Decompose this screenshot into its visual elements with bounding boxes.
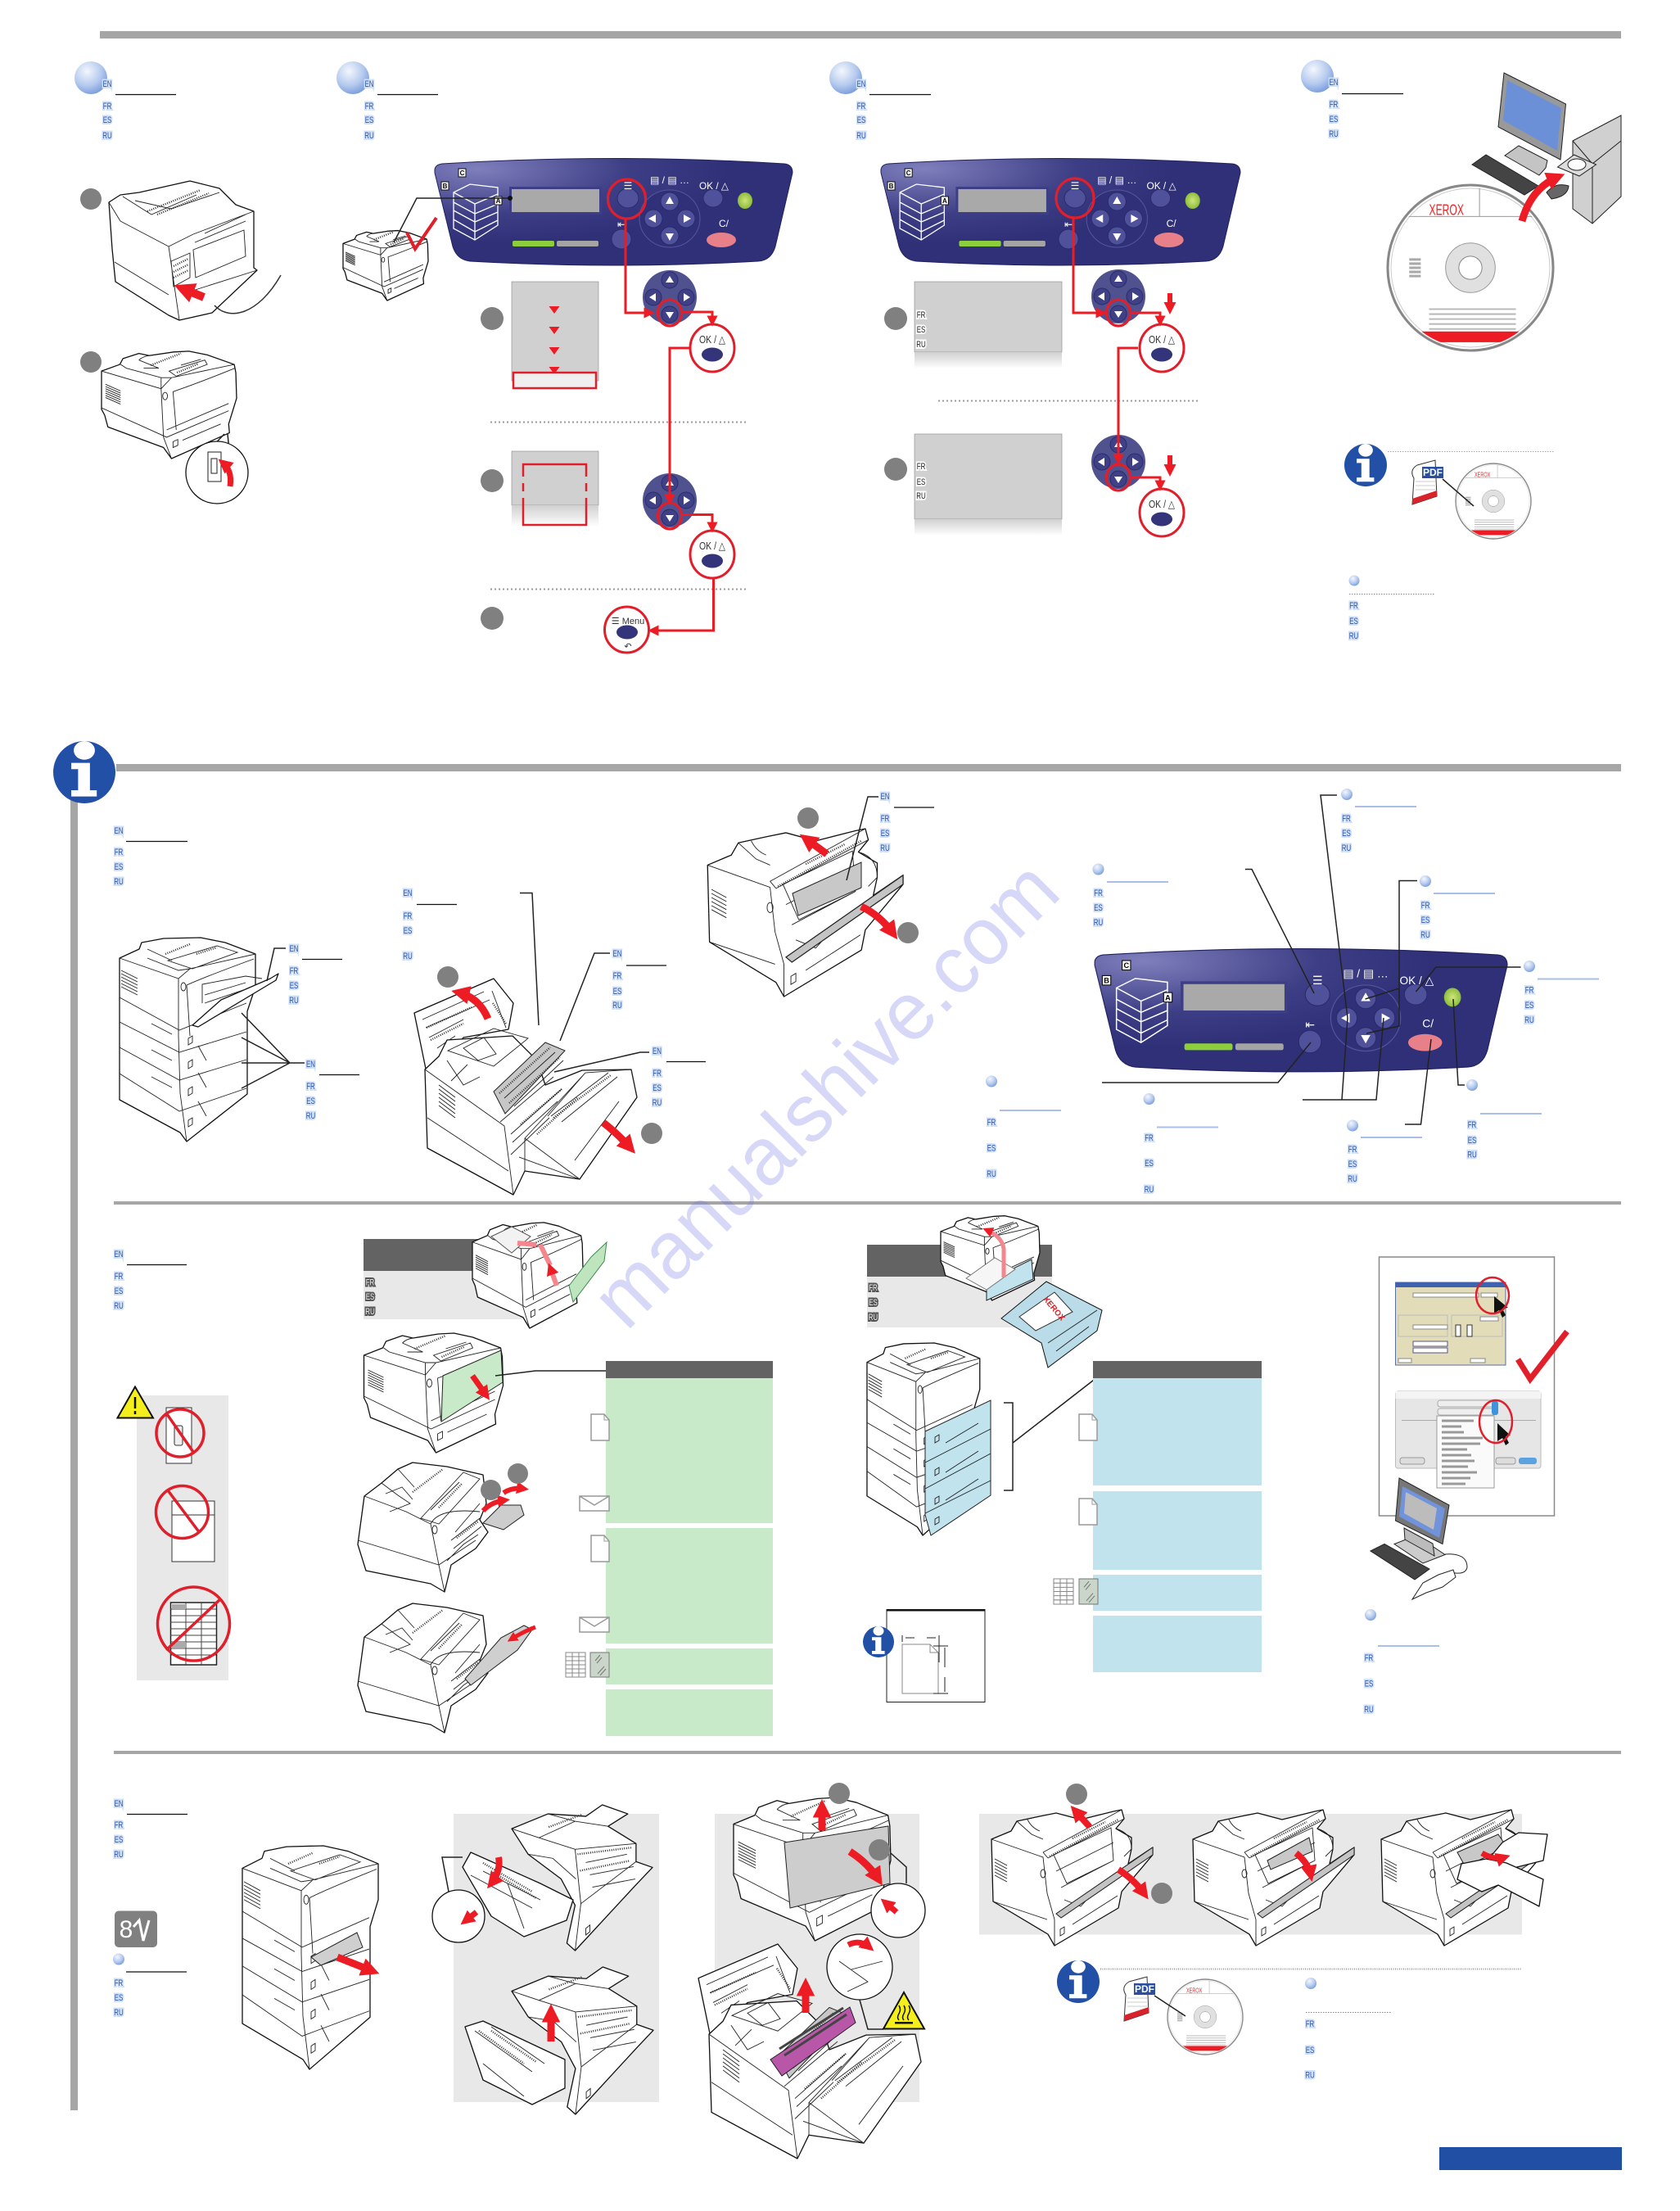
panel callout: cancel: RU (1348, 1174, 1357, 1184)
tall printer with trays (120, 938, 278, 1142)
driver note labels (1364, 1609, 1439, 1715)
label: bypass tray: RU (289, 996, 299, 1006)
printer with top cover (734, 1797, 891, 1941)
bracket and leader to tray table (1004, 1372, 1104, 1490)
step 2 language labels: EN (365, 79, 374, 89)
panel callout: OK: FR (1525, 985, 1533, 996)
control panel: step 2 (435, 159, 793, 265)
label: trays: FR (306, 1082, 315, 1092)
label: transfer roller (554, 1047, 706, 1108)
panel callout: menu: RU (1094, 918, 1103, 928)
printer with green bypass door (364, 1333, 606, 1453)
label: toner: EN (404, 888, 413, 898)
latch inset (871, 1853, 925, 1937)
label: transfer roller: ES (653, 1083, 662, 1093)
bypass tray header: RU (365, 1307, 375, 1317)
dotted divider (938, 400, 1198, 401)
red flow arrows step 3 (1056, 179, 1170, 491)
LED note labels: FR (115, 1978, 123, 1988)
prohibited: window envelope (156, 1408, 204, 1463)
tray media table (1093, 1361, 1262, 1672)
paper jam labels: EN (115, 1799, 124, 1809)
language LCD 2 (915, 434, 1062, 536)
label: toner (403, 888, 539, 1025)
note sphere (1305, 1978, 1316, 1989)
Mac print dialog (1395, 1391, 1541, 1488)
printer with paper in bypass (358, 1603, 535, 1733)
step 4 language labels (1329, 78, 1403, 139)
duplex printer step 3 with hands (1381, 1810, 1547, 1946)
step numbers on duplex printer (797, 807, 919, 943)
media icons: trays (1054, 1414, 1098, 1604)
label: transfer roller: RU (653, 1098, 662, 1108)
note language labels (1305, 2013, 1391, 2081)
printer overview labels: ES (115, 862, 123, 872)
panel callout: power saver: RU (1467, 1150, 1477, 1160)
label: bypass tray: FR (290, 966, 298, 976)
printer opening bypass extension (358, 1463, 524, 1592)
paper jam labels: FR (115, 1820, 123, 1830)
open printer with magenta fuser (698, 1944, 921, 2159)
step number: plug in (80, 188, 102, 210)
bypass tray header: ES (366, 1292, 374, 1302)
step 3 language labels: RU (856, 131, 866, 141)
language LCD 2: RU (916, 491, 926, 501)
step 4 language labels: EN (1330, 78, 1339, 88)
paper tray header (867, 1245, 1052, 1327)
mini printer with check mark and leader (343, 196, 513, 301)
note language labels: ES (1306, 2046, 1314, 2055)
step 2 language labels (364, 79, 438, 141)
large info icon (53, 741, 115, 803)
panel callout: menu (1092, 863, 1168, 928)
panel callout: left arrows: FR (1342, 814, 1351, 824)
printer with jam lifted (465, 1967, 653, 2114)
error LED icon (115, 1911, 157, 1947)
custom paper size diagram (863, 1609, 985, 1702)
info icon (1057, 1960, 1100, 2003)
step numbers on bypass (481, 1463, 528, 1500)
step 1 sphere (75, 61, 107, 94)
driver note labels: FR (1365, 1653, 1373, 1663)
panel callout: back (986, 1076, 1061, 1179)
navigation pad a (1091, 269, 1145, 323)
panel callout: back: FR (987, 1118, 996, 1128)
step 2 sphere (336, 61, 369, 94)
printer overview labels (114, 826, 187, 887)
panel callout: left right (1143, 1093, 1218, 1195)
OK button b (1140, 489, 1184, 536)
note language labels (1349, 595, 1435, 641)
OK button b (690, 531, 734, 578)
printer with blue tray and paper path (941, 1216, 1040, 1300)
PDF document and CD (1124, 1977, 1243, 2055)
duplex printer step 1 (991, 1810, 1153, 1946)
note sphere (1349, 575, 1359, 586)
illustration: printer with power switch inset (102, 351, 248, 504)
open printer with fuser (414, 979, 637, 1195)
dotted divider (1100, 1969, 1521, 1970)
panel callout: OK: RU (1524, 1015, 1534, 1025)
printer overview labels: EN (115, 826, 124, 836)
LED note labels: RU (114, 2008, 124, 2018)
step number a (481, 307, 504, 330)
note language labels: RU (1305, 2070, 1315, 2081)
panel callout: up down: FR (1421, 901, 1429, 911)
step 4 language labels: FR (1330, 100, 1338, 110)
info icon (1344, 444, 1387, 486)
panel callout: back: ES (987, 1143, 996, 1154)
paper tray with Xerox paper (1001, 1282, 1102, 1368)
panel callout: menu: FR (1094, 888, 1103, 898)
top header bar (100, 31, 1621, 38)
media icons: bypass (566, 1414, 609, 1677)
navigation pad b (1091, 435, 1145, 489)
label: toner: RU (403, 952, 413, 961)
printer with bypass tray and paper path (472, 1223, 607, 1328)
LED note labels: ES (115, 1993, 123, 2003)
LED note labels (113, 1954, 187, 2018)
section divider (114, 1201, 1621, 1205)
label: duplex (880, 792, 934, 853)
panel callout: left right: FR (1145, 1133, 1154, 1143)
section divider (114, 1751, 1621, 1754)
error LED icon: 8 (120, 1916, 133, 1943)
step 1 language labels (102, 79, 176, 141)
note language labels: FR (1306, 2019, 1314, 2029)
paper loading labels: RU (114, 1301, 124, 1311)
Windows print dialog (1395, 1277, 1509, 1365)
language LCD 1: FR (917, 310, 925, 320)
warning triangle (118, 1387, 153, 1418)
label: trays (242, 1013, 359, 1121)
paper jam labels: RU (114, 1850, 124, 1860)
step 4 language labels: ES (1330, 115, 1338, 124)
label: duplex: FR (881, 814, 889, 824)
paper jam labels: ES (115, 1835, 123, 1845)
bypass tray header (364, 1239, 553, 1319)
PDF document and CD (1412, 460, 1531, 539)
navigation pad b (643, 473, 697, 527)
step number a (884, 307, 907, 330)
tall printer with blue trays (867, 1343, 991, 1535)
OK button a (690, 324, 734, 372)
step 3 language labels: FR (857, 102, 865, 111)
driver note labels: ES (1365, 1679, 1373, 1689)
paper tray header: RU (869, 1313, 878, 1323)
panel callout: left arrows: RU (1342, 843, 1351, 853)
step number b (481, 469, 504, 492)
printer overview labels: FR (115, 848, 123, 857)
arrow: top cover open (458, 992, 488, 1019)
paper loading labels: EN (115, 1250, 124, 1259)
panel callout: left right: RU (1145, 1185, 1154, 1195)
installation CD (1388, 185, 1553, 350)
panel callout: up down: RU (1420, 930, 1430, 940)
label: trays: RU (306, 1111, 315, 1121)
vertical section rule (70, 798, 78, 2110)
label: bypass tray: EN (290, 944, 299, 954)
illustration: printer rear with power cord (109, 181, 281, 320)
watermark: manualshive.com (574, 843, 1076, 1345)
paper jam labels (114, 1799, 187, 1860)
step 1 language labels: EN (103, 79, 112, 89)
prohibited: clasp envelope (156, 1485, 215, 1562)
panel callout: OK (1524, 961, 1599, 1025)
fuser lever inset (827, 1934, 892, 2029)
arrows on duplex printer (806, 839, 893, 934)
label: trays: EN (306, 1060, 315, 1069)
label: duplex: EN (881, 792, 890, 802)
prohibited: label sheet (157, 1587, 229, 1665)
navigation pad a (643, 270, 697, 324)
menu button callout: ☰ Menu (612, 617, 644, 626)
panel callout: left right: ES (1145, 1159, 1154, 1169)
label: toner: ES (404, 926, 412, 936)
panel callout: back: RU (987, 1169, 996, 1179)
label: bypass tray (267, 944, 342, 1006)
dotted divider (490, 421, 748, 423)
illustration: computer (1472, 73, 1621, 224)
OK button a (1140, 324, 1184, 372)
step 3 language labels (856, 79, 931, 141)
control panel: step 3 (881, 159, 1240, 265)
note language labels: FR (1349, 601, 1358, 611)
panel: front cover jam (454, 1814, 659, 2102)
panel callout: left arrows: ES (1342, 829, 1351, 839)
label: duplex: RU (880, 843, 890, 853)
LCD menu with red triangles (512, 282, 598, 388)
note language labels: ES (1349, 617, 1358, 626)
step 2 language labels: ES (365, 115, 373, 125)
label: fuser (560, 949, 666, 1041)
large control panel (1095, 949, 1507, 1072)
label: transfer roller: EN (653, 1047, 662, 1056)
step 4 sphere (1301, 60, 1334, 93)
panel callout: menu: ES (1094, 903, 1103, 913)
panel callout: cancel (1347, 1120, 1422, 1184)
arrow: rear door open (603, 1123, 630, 1148)
red flow arrows step 2 (607, 179, 714, 631)
label: fuser: RU (612, 1001, 622, 1011)
user at computer (1371, 1478, 1467, 1599)
step 3 language labels: EN (857, 79, 866, 89)
label: fuser: EN (613, 949, 622, 959)
panel callout: up down (1420, 875, 1495, 940)
label: fuser: ES (613, 987, 621, 997)
menu button callout: ↶ (624, 642, 632, 652)
panel callout: power saver (1466, 1079, 1542, 1160)
footer blue box (1439, 2147, 1622, 2170)
language LCD 2: ES (917, 477, 925, 487)
menu button callout (604, 607, 648, 653)
panel callout: power saver: FR (1468, 1120, 1476, 1130)
step 1 language labels: ES (103, 115, 111, 125)
bypass media table (606, 1361, 773, 1736)
step numbers on duplex jam (1066, 1784, 1172, 1904)
tall printer with jam at tray (242, 1846, 378, 2069)
open printer, duplex unit (707, 797, 903, 997)
panel callout: power saver: ES (1468, 1136, 1476, 1146)
paper tray with Xerox paper: XEROX (1041, 1295, 1067, 1323)
language LCD 2: FR (917, 462, 925, 472)
paper loading labels: FR (115, 1272, 123, 1282)
note language labels: RU (1349, 631, 1358, 641)
step 4 language labels: RU (1329, 129, 1339, 139)
check mark (1518, 1332, 1567, 1379)
driver dialogs frame (1379, 1257, 1554, 1516)
step 1 language labels: FR (103, 102, 111, 111)
bypass tray header: FR (366, 1277, 374, 1288)
red arrow into drive (1522, 177, 1558, 221)
language LCD 1: RU (916, 340, 926, 350)
label: transfer roller: FR (653, 1069, 662, 1078)
hot surface warning (883, 1992, 924, 2029)
panel callout: up down: ES (1421, 916, 1429, 925)
paper loading labels (114, 1250, 187, 1311)
paper tray header: ES (869, 1298, 878, 1308)
language LCD 1: ES (917, 325, 925, 335)
step 1 language labels: RU (102, 131, 112, 141)
printer overview labels: RU (114, 877, 124, 887)
step number c (481, 607, 504, 630)
dotted divider (1388, 450, 1555, 452)
panel callout: cancel: FR (1348, 1145, 1357, 1155)
step 3 language labels: ES (857, 115, 865, 125)
panel callout: OK: ES (1525, 1001, 1533, 1011)
LCD value with dashed selection (512, 451, 598, 527)
leader lines for control panel (1102, 795, 1521, 1124)
information section bar (116, 764, 1621, 771)
paper loading labels: ES (115, 1286, 123, 1296)
step number b (884, 458, 907, 481)
label: toner: FR (404, 911, 412, 921)
label: trays: ES (306, 1096, 315, 1106)
label: fuser: FR (613, 971, 621, 981)
label: duplex: ES (881, 829, 889, 839)
paper tray header: FR (869, 1283, 878, 1293)
panel callout: cancel: ES (1348, 1160, 1357, 1169)
panel: do not use media (137, 1395, 228, 1680)
step 3 sphere (829, 61, 862, 94)
duplex printer step 2 (1193, 1810, 1354, 1946)
dotted divider (490, 588, 748, 590)
step numbers on fuser panel (829, 1783, 890, 1861)
panel callout: left arrows (1341, 789, 1416, 853)
language LCD 1 (915, 282, 1062, 368)
printer with transfer unit removed (432, 1805, 653, 1951)
step number: power on (80, 351, 102, 373)
panel: duplex jam (979, 1814, 1522, 1934)
label: bypass tray: ES (290, 981, 298, 991)
driver note labels: RU (1364, 1705, 1374, 1715)
step 2 language labels: RU (364, 131, 374, 141)
panel: fuser jam (715, 1814, 919, 2102)
step numbers on open printer (437, 966, 662, 1144)
step 2 language labels: FR (365, 102, 373, 111)
